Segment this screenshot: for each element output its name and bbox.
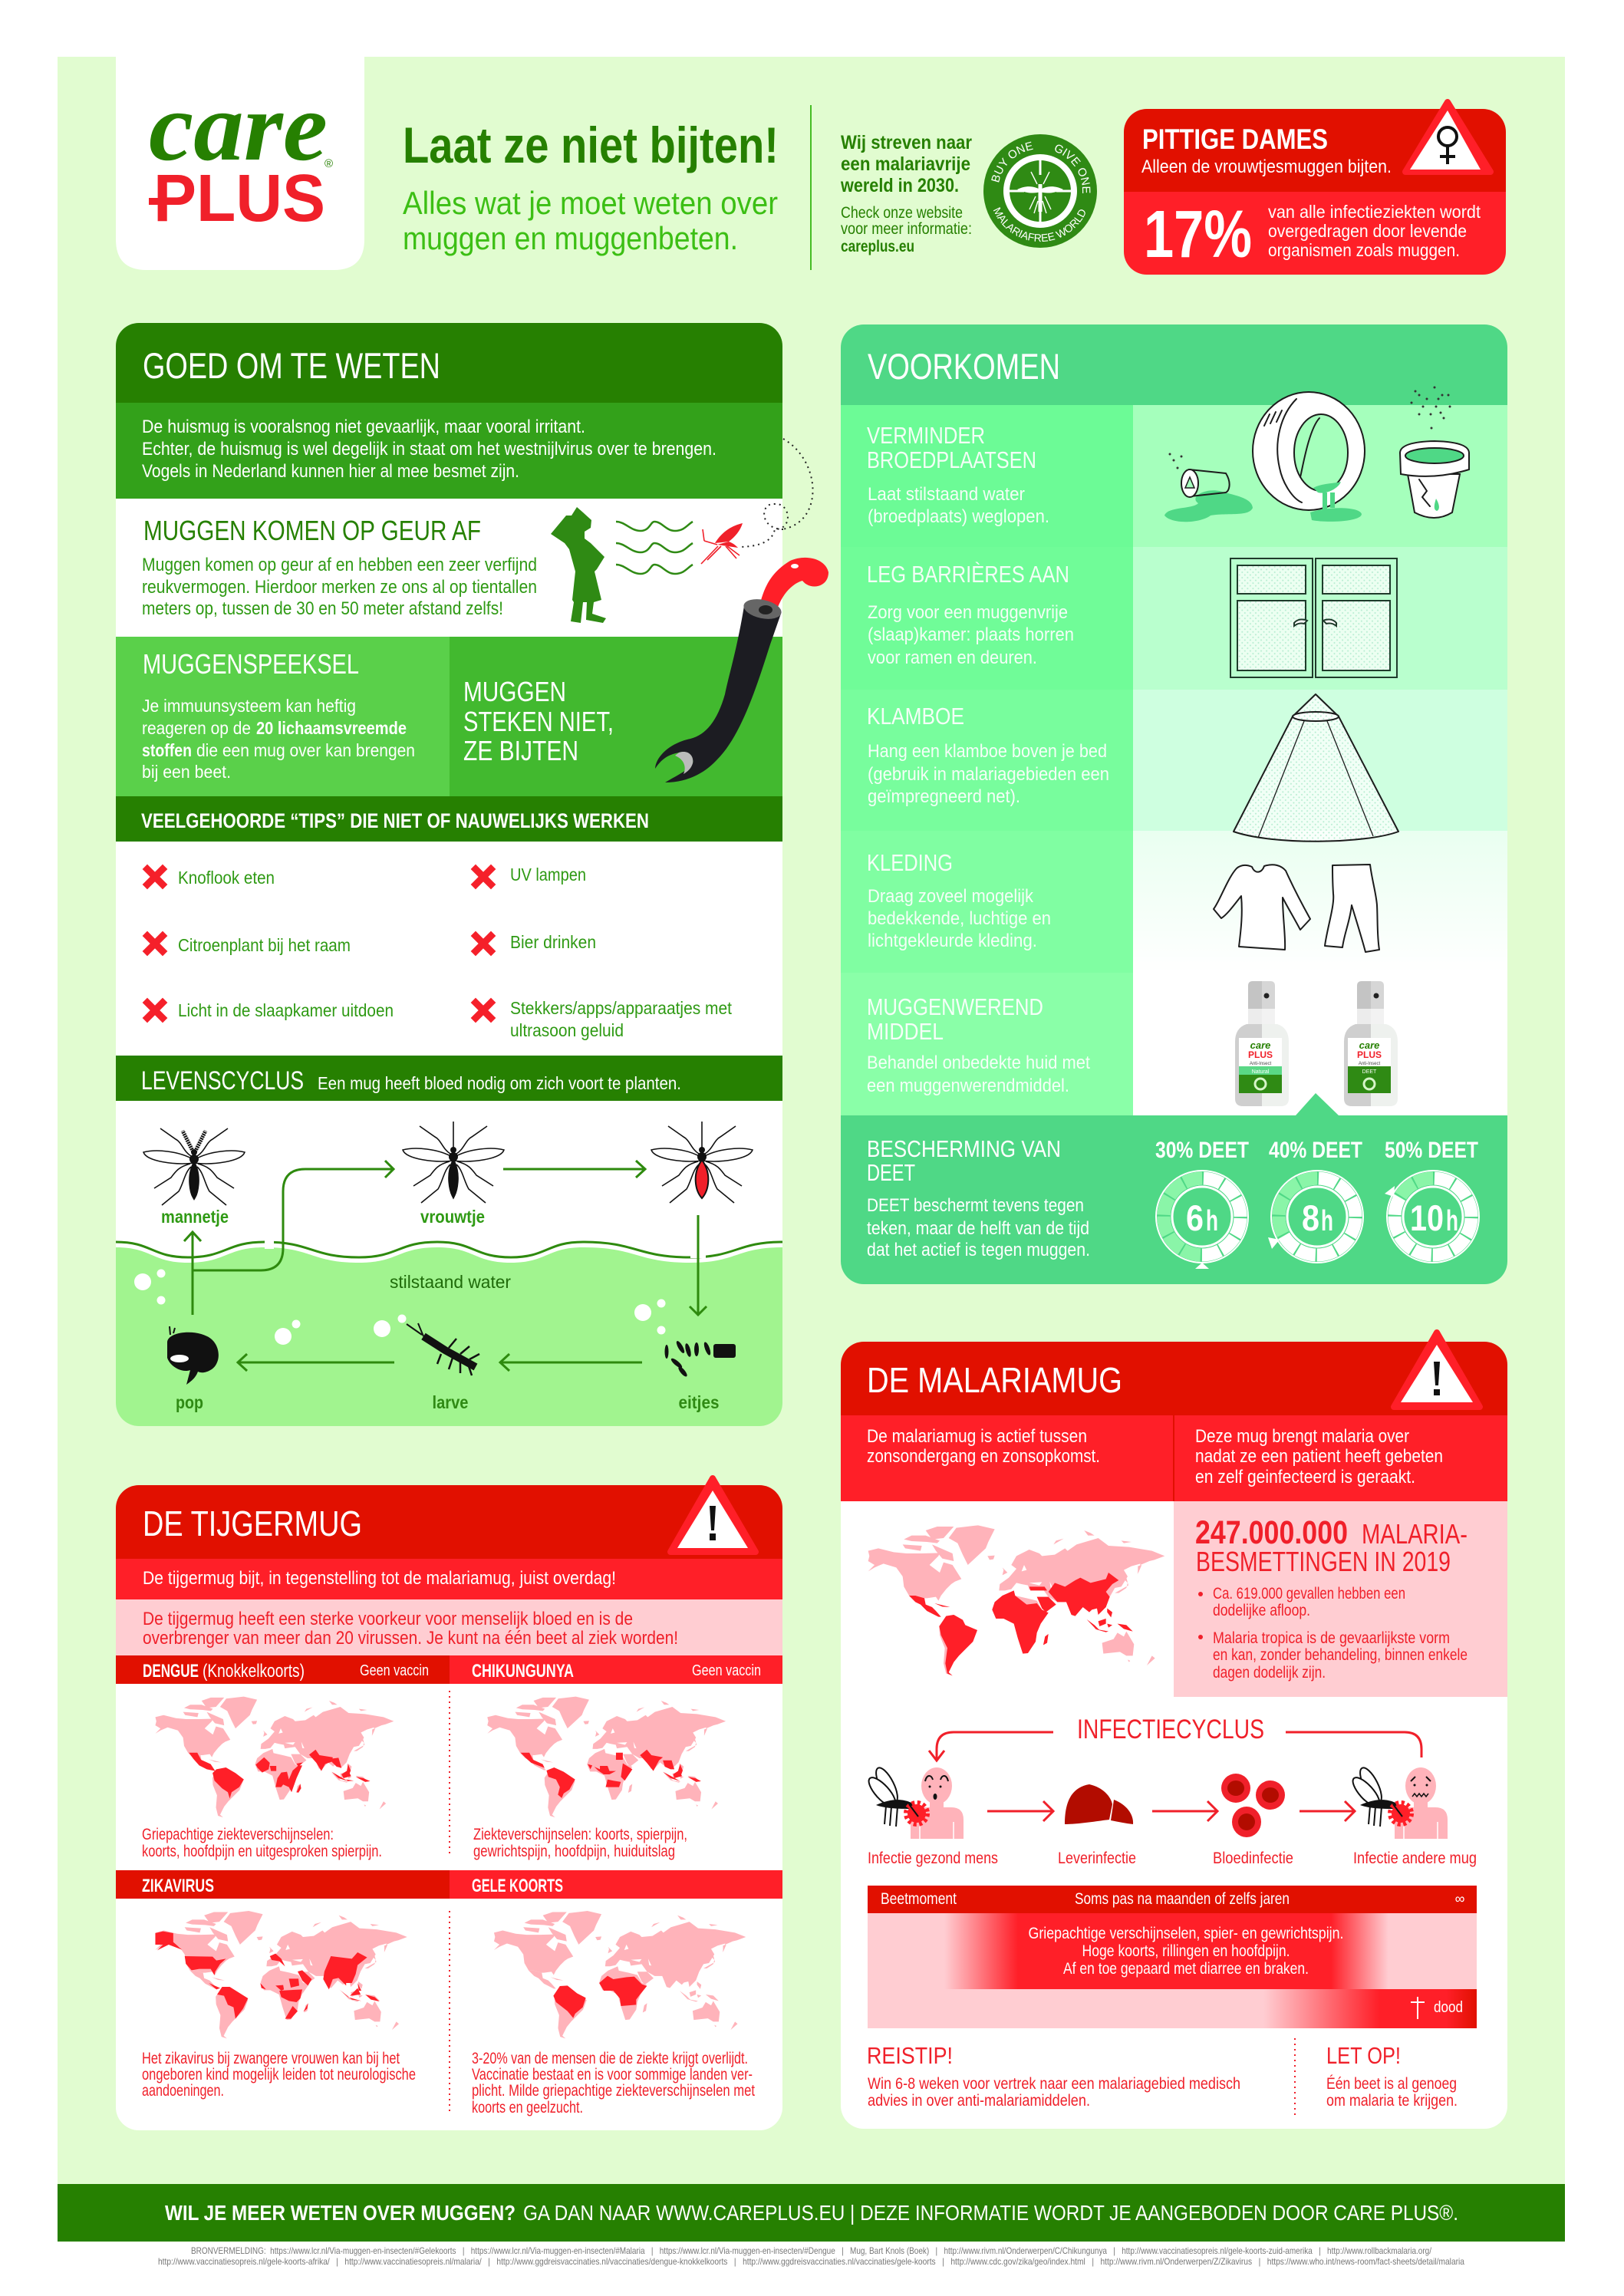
arrow: to liver <box>987 1801 1053 1821</box>
heading: de malariamug: DE MALARIAMUG <box>867 1360 1122 1400</box>
labels: pop larve eitjes: pop <box>176 1392 203 1412</box>
chart: timeline: Af en toe gepaard met diarree en braken. <box>1063 1960 1309 1978</box>
text: gele koorts: plicht. Milde griepachtige ziekteverschijnselen met <box>472 2082 755 2100</box>
labels: infection steps: Infectie gezond mens <box>868 1850 998 1867</box>
label: mannetje: mannetje <box>161 1207 229 1227</box>
text: geur: meters op, tussen de 30 en 50 meter afstand zelfs! <box>142 598 503 619</box>
stat: 247.000.000 malaria-besmettingen: BESMETTINGEN IN 2019 <box>1196 1546 1451 1577</box>
text: gele koorts: Vaccinatie bestaat en is voor sommige landen ver- <box>472 2066 753 2084</box>
labels: pop larve eitjes: larve <box>433 1392 468 1412</box>
text: voorkeur menselijk bloed: overbrenger van meer dan 20 virussen. Je kunt na één beet al ziek worden! <box>143 1628 678 1649</box>
icon: female mosquito <box>403 1122 504 1203</box>
text: muggenwerend middel: een muggenwerendmiddel. <box>867 1076 1069 1096</box>
list: tips: Bier drinken <box>510 932 596 952</box>
text: klamboe <box>867 703 1109 807</box>
chart: deet 50 percent 10h: h <box>1446 1205 1458 1237</box>
subtitle: Alles wat je moet weten over <box>403 185 778 221</box>
icon: blood cells <box>1221 1774 1285 1837</box>
heading: chikungunya: Geen vaccin <box>692 1662 761 1679</box>
text block: malariavrije wereld <box>840 132 972 255</box>
text: alleen de vrouwtjesmuggen: Alleen de vrouwtjesmuggen bijten. <box>1141 156 1392 177</box>
callout: let op: om malaria te krijgen. <box>1326 2092 1458 2110</box>
text: zika: aandoeningen. <box>142 2082 224 2100</box>
logo: Care Plus: care <box>149 72 328 181</box>
text: verminder broedplaatsen: BROEDPLAATSEN <box>867 446 1036 473</box>
heading: muggen komen op geur af: MUGGEN KOMEN OP GEUR AF <box>143 515 481 546</box>
heading: veelgehoorde tips: VEELGEHOORDE “TIPS” DIE NIET OF NAUWELIJKS WERKEN <box>141 809 649 832</box>
list: malaria facts: dodelijke afloop. <box>1213 1602 1310 1619</box>
icon: spray bottle natural: Natural <box>1252 1069 1270 1075</box>
icon: smell waves <box>616 522 693 574</box>
illustration: can, tire, bucket <box>1164 387 1469 522</box>
text: actief: De malariamug is actief tussen <box>867 1426 1087 1447</box>
text: actief <box>867 1426 1100 1467</box>
icon: spray bottle deet: PLUS <box>1357 1049 1382 1060</box>
map: zikavirus <box>155 1911 407 2038</box>
pointer triangle <box>1296 1093 1339 1115</box>
text block: malariavrije wereld: Wij streven naar <box>841 132 972 153</box>
icon: spray bottle natural: care <box>1250 1039 1270 1051</box>
callout: reistip: REISTIP! <box>867 2042 953 2069</box>
arrow: to infected person <box>1300 1801 1355 1821</box>
text: klamboe: geïmpregneerd net). <box>868 786 1020 807</box>
panel: goed om te weten <box>116 323 828 1426</box>
icon: mosquito proboscis with tongue <box>655 558 828 782</box>
heading: chikungunya: CHIKUNGUNYA <box>472 1661 574 1682</box>
text: zika: Het zikavirus bij zwangere vrouwen kan bij het <box>142 2050 400 2067</box>
heading: de tijgermug: DE TIJGERMUG <box>143 1504 362 1543</box>
text block: malariavrije wereld: voor meer informatie: <box>841 220 972 238</box>
text: bescherming van deet: teken, maar de helft van de tijd <box>867 1218 1089 1239</box>
text: overdracht: en zelf geinfecteerd is geraakt. <box>1195 1467 1415 1487</box>
text: verminder broedplaatsen: (broedplaats) weglopen. <box>868 506 1049 527</box>
text: overdracht <box>1195 1426 1443 1487</box>
text block: malariavrije wereld: careplus.eu <box>841 238 914 255</box>
text: bescherming van deet: dat het actief is tegen muggen. <box>867 1240 1090 1260</box>
text: klamboe: (gebruik in malariagebieden een <box>868 764 1109 785</box>
text: chikungunya symptoms: Ziekteverschijnselen: koorts, spierpijn, <box>473 1826 687 1843</box>
text: huismug intro <box>142 417 716 482</box>
label: vrouwtje: vrouwtje <box>420 1207 485 1227</box>
bubbles <box>134 1269 666 1345</box>
callout: let op: LET OP! <box>1326 2042 1401 2069</box>
callout: reistip: Win 6-8 weken voor vertrek naar een malariagebied medisch <box>868 2075 1240 2093</box>
stat: 247.000.000 malaria-besmettingen <box>1195 1514 1468 1577</box>
text: speeksel: reageren op de <box>142 718 251 738</box>
text: muggenwerend middel <box>867 993 1090 1096</box>
text: gele koorts: 3-20% van de mensen die de ziekte krijgt overlijdt. <box>472 2050 748 2067</box>
footer banner <box>58 2184 1565 2242</box>
chart: deet 40 percent 8h <box>1268 1138 1363 1263</box>
list: malaria facts: Malaria tropica is de gevaarlijkste vorm <box>1213 1629 1450 1647</box>
icon: spray bottle natural <box>1235 981 1289 1106</box>
map: dengue <box>155 1697 394 1817</box>
chart: deet 30 percent 6h: h <box>1206 1205 1218 1237</box>
text: huismug intro: Echter, de huismug is wel degelijk in staat om het westnijlvirus over te brengen. <box>142 439 716 460</box>
icon: bitten person <box>865 1765 964 1839</box>
heading: gele koorts: GELE KOORTS <box>472 1876 563 1896</box>
heading: muggen steken niet <box>463 676 614 766</box>
text: geur: Muggen komen op geur af en hebben een zeer verfijnd <box>142 555 537 575</box>
sources <box>158 2245 1464 2267</box>
map: malaria <box>868 1525 1164 1675</box>
icon: malariafree badge <box>983 134 1097 248</box>
stat: 17%: 17% <box>1144 197 1252 272</box>
chart: timeline: Hoge koorts, rillingen en hoofdpijn. <box>1082 1942 1290 1960</box>
heading: muggen steken niet: MUGGEN <box>463 676 566 707</box>
icon: red mosquito <box>701 523 743 564</box>
text: bescherming van deet: BESCHERMING VAN <box>867 1135 1061 1162</box>
text: leg barrieres aan <box>867 561 1074 668</box>
callout: reistip: advies in over anti-malariamiddelen. <box>868 2092 1090 2110</box>
list: tips <box>147 865 733 1040</box>
icon: malariafree badge: MALARIAFREE WORLD <box>993 207 1085 242</box>
text block: malariavrije wereld: wereld in 2030. <box>840 175 959 196</box>
text: infectieziekten: overgedragen door levende <box>1268 221 1467 241</box>
icon: eggs <box>664 1340 736 1378</box>
subtitle: muggen en muggenbeten. <box>403 220 738 256</box>
chart: deet 50 percent 10h <box>1385 1138 1479 1263</box>
text: kleding: lichtgekleurde kleding. <box>868 931 1037 951</box>
heading: zikavirus: ZIKAVIRUS <box>142 1876 214 1896</box>
map: gele koorts <box>494 1911 746 2038</box>
text: klamboe: KLAMBOE <box>867 703 964 730</box>
list: malaria facts: dagen dodelijk zijn. <box>1213 1664 1326 1682</box>
text: dengue symptoms: Griepachtige ziekteverschijnselen: <box>142 1826 334 1843</box>
chart: deet 50 percent 10h: 50% DEET <box>1385 1138 1478 1163</box>
logo: Care Plus <box>116 57 364 270</box>
icon: warning triangle <box>1394 1332 1480 1407</box>
text: klamboe: Hang een klamboe boven je bed <box>868 741 1107 762</box>
text: verminder broedplaatsen <box>867 422 1049 527</box>
text: kleding: bedekkende, luchtige en <box>868 908 1051 929</box>
chart: timeline <box>868 1886 1477 2028</box>
labels: infection steps: Leverinfectie <box>1058 1850 1136 1867</box>
text: gele koorts <box>472 2050 755 2116</box>
labels: pop larve eitjes: eitjes <box>678 1392 720 1412</box>
chart: deet 40 percent 8h: h <box>1321 1205 1333 1237</box>
chart: deet 30 percent 6h: 30% DEET <box>1155 1138 1249 1163</box>
text: voorkeur menselijk bloed: De tijgermug heeft een sterke voorkeur voor menselijk bloed en is de <box>143 1609 633 1629</box>
text: bescherming van deet <box>867 1135 1090 1260</box>
icon: spray bottle deet: Anti-Insect <box>1359 1062 1380 1066</box>
chart: timeline: dood <box>1434 1999 1463 2016</box>
list: tips: UV lampen <box>510 865 586 884</box>
text block: malariavrije wereld: een malariavrije <box>841 153 970 175</box>
callout: let op: Één beet is al genoeg <box>1326 2075 1457 2093</box>
text: huismug intro: Vogels in Nederland kunnen hier al mee besmet zijn. <box>142 461 519 482</box>
text: overdracht: nadat ze een patient heeft gebeten <box>1195 1446 1443 1467</box>
icon: spray bottle natural: Anti-Insect <box>1250 1062 1271 1066</box>
list: tips: Stekkers/apps/apparaatjes met <box>510 998 733 1018</box>
list: tips: Licht in de slaapkamer uitdoen <box>178 1000 394 1020</box>
arrow: to blood <box>1152 1801 1217 1821</box>
arrows: cycle loop <box>929 1732 1421 1761</box>
text: bescherming van deet: DEET <box>867 1159 915 1186</box>
text: chikungunya symptoms: gewrichtspijn, hoofdpijn, huiduitslag <box>473 1843 675 1860</box>
heading: infectiecyclus: INFECTIECYCLUS <box>1077 1715 1264 1744</box>
text: leg barrieres aan: (slaap)kamer: plaats horren <box>868 624 1074 645</box>
dotted flight path <box>740 439 813 547</box>
panel: voorkomen <box>841 324 1507 1284</box>
panel: de malariamug <box>841 1332 1507 2129</box>
text: speeksel: bij een beet. <box>142 762 231 782</box>
chart: timeline: Beetmoment <box>881 1890 957 1908</box>
list: malaria facts <box>1198 1585 1468 1682</box>
illustration: mosquito net <box>1234 694 1398 842</box>
text: zika <box>142 2050 416 2100</box>
icon: infected person <box>1349 1765 1448 1839</box>
text: verminder broedplaatsen: Laat stilstaand water <box>868 484 1025 505</box>
heading: dengue: DENGUE <box>143 1661 199 1682</box>
text: speeksel: stoffen <box>142 740 192 760</box>
icon: warning triangle female symbol <box>1405 102 1491 172</box>
heading: levenscyclus <box>141 1066 681 1095</box>
heading: dengue: Geen vaccin <box>360 1662 429 1679</box>
text: muggenwerend middel: Behandel onbedekte huid met <box>867 1052 1090 1073</box>
text: leg barrieres aan: Zorg voor een muggenvrije <box>868 602 1068 623</box>
icon: malariafree badge: GIVE ONE <box>1055 144 1091 193</box>
text: infectieziekten: organismen zoals muggen. <box>1268 240 1460 260</box>
footer banner: WIL JE MEER WETEN OVER MUGGEN? <box>165 2201 516 2225</box>
text: dengue symptoms: koorts, hoofdpijn en uitgesproken spierpijn. <box>142 1843 382 1860</box>
heading: muggen steken niet: STEKEN NIET, <box>463 706 614 737</box>
arrows: cycle <box>184 1161 707 1371</box>
heading: levenscyclus: Een mug heeft bloed nodig om zich voort te planten. <box>318 1073 681 1093</box>
illustration: clothing <box>1214 865 1379 952</box>
text: overdracht: Deze mug brengt malaria over <box>1195 1426 1409 1447</box>
text: speeksel <box>142 696 415 782</box>
stat: 247.000.000 malaria-besmettingen: 247.000.000 <box>1195 1514 1348 1551</box>
list: tips: Citroenplant bij het raam <box>178 935 351 955</box>
text: geur: reukvermogen. Hierdoor merken ze ons al op tientallen <box>142 577 537 598</box>
chart: timeline: Soms pas na maanden of zelfs jaren <box>1075 1890 1290 1908</box>
illustration: window <box>1230 558 1397 677</box>
icon: spray bottle deet: care <box>1359 1039 1379 1051</box>
title: Laat ze niet bijten! <box>403 117 779 173</box>
text: geur <box>142 555 537 619</box>
stat: 247.000.000 malaria-besmettingen: MALARIA- <box>1362 1518 1468 1550</box>
labels: pop larve eitjes <box>176 1392 720 1412</box>
text: voorkeur menselijk bloed <box>143 1609 678 1649</box>
heading: goed om te weten: GOED OM TE WETEN <box>143 345 440 386</box>
icon: pupa <box>167 1326 219 1385</box>
chart: deet 40 percent 8h: 40% DEET <box>1269 1138 1362 1163</box>
footer banner: GA DAN NAAR WWW.CAREPLUS.EU | DEZE INFORMATIE WORDT JE AANGEBODEN DOOR CARE PLUS®. <box>523 2201 1458 2225</box>
chart: deet 40 percent 8h: 8 <box>1302 1197 1319 1238</box>
text: kleding: Draag zoveel mogelijk <box>868 886 1034 907</box>
list: malaria facts: Ca. 619.000 gevallen hebben een <box>1213 1585 1405 1603</box>
text: huismug intro: De huismug is vooralsnog niet gevaarlijk, maar vooral irritant. <box>142 417 585 437</box>
text block: malariavrije wereld: Check onze website <box>841 204 963 222</box>
icon: warning triangle <box>670 1478 756 1552</box>
text: speeksel: Je immuunsysteem kan heftig <box>142 696 356 716</box>
text: infectieziekten: van alle infectieziekten wordt <box>1268 202 1481 222</box>
icon: spray bottle deet <box>1344 981 1398 1106</box>
heading: muggenspeeksel: MUGGENSPEEKSEL <box>143 648 359 680</box>
text: infectieziekten <box>1268 202 1481 260</box>
chart: deet 30 percent 6h <box>1155 1138 1249 1269</box>
heading: voorkomen: VOORKOMEN <box>868 346 1060 387</box>
text: leg barrieres aan: LEG BARRIÈRES AAN <box>867 561 1069 588</box>
callout: let op <box>1326 2042 1458 2110</box>
text: overdag: De tijgermug bijt, in tegenstelling tot de malariamug, juist overdag! <box>143 1568 616 1589</box>
heading: dengue <box>143 1661 429 1682</box>
chart: deet 30 percent 6h: 6 <box>1186 1197 1204 1238</box>
icon: larva <box>407 1323 479 1375</box>
labels: infection steps: Infectie andere mug <box>1353 1850 1477 1867</box>
subtitle <box>403 185 778 256</box>
icon: blood-fed mosquito <box>651 1122 753 1203</box>
text: chikungunya symptoms <box>473 1826 687 1860</box>
text: kleding: KLEDING <box>867 849 953 876</box>
text: leg barrieres aan: voor ramen en deuren. <box>868 647 1037 668</box>
label: stilstaand water: stilstaand water <box>390 1272 511 1292</box>
icon: liver <box>1065 1784 1133 1824</box>
text: zika: ongeboren kind mogelijk leiden tot neurologische <box>142 2066 416 2084</box>
chart: timeline: ∞ <box>1455 1891 1465 1906</box>
chart: life cycle <box>134 1122 753 1412</box>
heading: muggen steken niet: ZE BIJTEN <box>463 735 578 766</box>
text: actief: zonsondergang en zonsopkomst. <box>867 1446 1100 1467</box>
text: speeksel: die een mug over kan brengen <box>196 740 415 760</box>
heading: levenscyclus: LEVENSCYCLUS <box>141 1066 304 1095</box>
list: tips: Knoflook eten <box>178 868 275 888</box>
panel: pittige dames <box>1124 102 1506 275</box>
list: tips: ultrasoon geluid <box>510 1020 624 1040</box>
heading: dengue: (Knokkelkoorts) <box>203 1661 305 1682</box>
icon: spray bottle natural: PLUS <box>1248 1049 1273 1060</box>
icon: malariafree badge: BUY ONE <box>991 141 1033 183</box>
text: verminder broedplaatsen: VERMINDER <box>867 422 985 449</box>
icon: man sniffing <box>551 507 606 623</box>
text: gele koorts: koorts en geelzucht. <box>472 2099 583 2116</box>
callout: reistip <box>867 2042 1240 2110</box>
heading: chikungunya <box>472 1661 761 1682</box>
list: malaria facts: en kan, zonder behandeling, binnen enkele <box>1213 1646 1468 1664</box>
text: dengue symptoms <box>142 1826 382 1860</box>
chart: timeline: Griepachtige verschijnselen, spier- en gewrichtspijn. <box>1028 1925 1344 1942</box>
logo: Care Plus: ® <box>324 157 333 170</box>
chart: deet 50 percent 10h: 10 <box>1410 1197 1444 1238</box>
logo: Care Plus: PLUS <box>153 161 325 236</box>
heading: pittige dames: PITTIGE DAMES <box>1142 124 1328 155</box>
map: chikungunya <box>487 1697 726 1817</box>
panel: de tijgermug <box>116 1478 782 2130</box>
text: kleding <box>867 849 1051 951</box>
text: speeksel: 20 lichaamsvreemde <box>256 718 407 738</box>
text: bescherming van deet: DEET beschermt tevens tegen <box>867 1195 1084 1216</box>
icon: spray bottle deet: DEET <box>1362 1069 1377 1075</box>
text: muggenwerend middel: MIDDEL <box>867 1018 944 1045</box>
icon: male mosquito <box>143 1128 245 1205</box>
text: muggenwerend middel: MUGGENWEREND <box>867 993 1043 1020</box>
labels: infection steps <box>868 1850 1477 1867</box>
labels: infection steps: Bloedinfectie <box>1213 1850 1293 1867</box>
